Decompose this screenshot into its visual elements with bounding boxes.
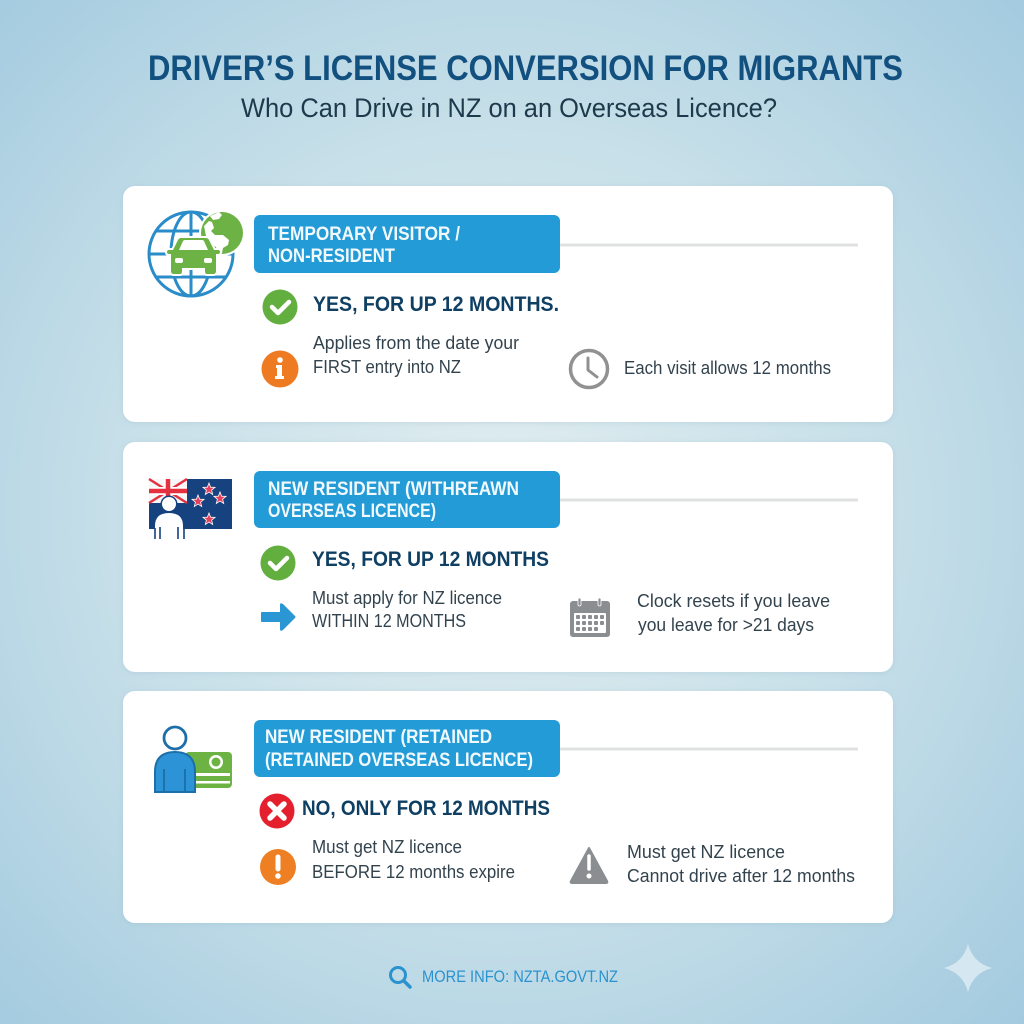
icon: NZ flag with person xyxy=(149,479,232,540)
icon: blue arrow xyxy=(261,603,296,631)
note: first entry: FIRST entry into NZ xyxy=(313,357,461,377)
header: new resident retained: (RETAINED OVERSEAS LICENCE) xyxy=(265,750,533,771)
icon: orange exclamation xyxy=(260,849,296,885)
icon: red cross xyxy=(260,794,294,828)
note: cannot drive after xyxy=(627,842,855,886)
answer: YES, FOR UP 12 MONTHS. xyxy=(313,293,559,316)
title: DRIVER’S LICENSE CONVERSION FOR MIGRANTS xyxy=(148,49,903,88)
note: cannot drive after: Cannot drive after 12 months xyxy=(627,866,855,886)
icon: globe with car xyxy=(149,210,245,296)
icon: clock xyxy=(570,350,608,388)
header: new resident withdrawn xyxy=(254,471,560,528)
note: clock resets xyxy=(637,591,830,635)
note: before 12 months expire xyxy=(312,837,515,882)
note: each visit: Each visit allows 12 months xyxy=(624,358,831,378)
answer: NO, ONLY FOR 12 MONTHS xyxy=(302,797,550,820)
note: apply within 12 months: Must apply for NZ licence xyxy=(312,588,502,608)
icon: sparkle xyxy=(944,944,992,992)
panel: new resident retained xyxy=(123,691,893,923)
subtitle: Who Can Drive in NZ on an Overseas Licence? xyxy=(241,93,777,123)
header: temporary visitor: TEMPORARY VISITOR / xyxy=(268,224,461,245)
header: new resident retained xyxy=(254,720,560,777)
icon: calendar xyxy=(570,598,610,637)
header: new resident withdrawn: OVERSEAS LICENCE) xyxy=(268,501,436,522)
note: before 12 months expire: BEFORE 12 months expire xyxy=(312,862,515,882)
header: temporary visitor: NON-RESIDENT xyxy=(268,246,395,267)
footer: more info: MORE INFO: NZTA.GOVT.NZ xyxy=(422,967,618,986)
note: first entry xyxy=(313,333,519,377)
icon: green check xyxy=(262,290,298,324)
panel: temporary visitor xyxy=(123,186,893,422)
note: clock resets: Clock resets if you leave xyxy=(637,591,830,611)
note: apply within 12 months: WITHIN 12 MONTHS xyxy=(312,611,466,631)
note: before 12 months expire: Must get NZ licence xyxy=(312,837,462,857)
note: apply within 12 months xyxy=(312,588,502,631)
note: cannot drive after: Must get NZ licence xyxy=(627,842,785,862)
answer: YES, FOR UP 12 MONTHS xyxy=(312,548,549,571)
note: clock resets: you leave for >21 days xyxy=(638,615,814,635)
icon: person with licence card xyxy=(155,727,232,792)
header: temporary visitor xyxy=(254,215,560,273)
note: first entry: Applies from the date your xyxy=(313,333,519,353)
header: new resident withdrawn: NEW RESIDENT (WITHREAWN xyxy=(268,479,519,500)
icon: green check xyxy=(260,546,296,580)
panel: new resident withdrawn xyxy=(123,442,893,672)
icon: info xyxy=(262,350,298,388)
icon: warning triangle xyxy=(571,848,607,883)
header: new resident retained: NEW RESIDENT (RETAINED xyxy=(265,727,492,748)
